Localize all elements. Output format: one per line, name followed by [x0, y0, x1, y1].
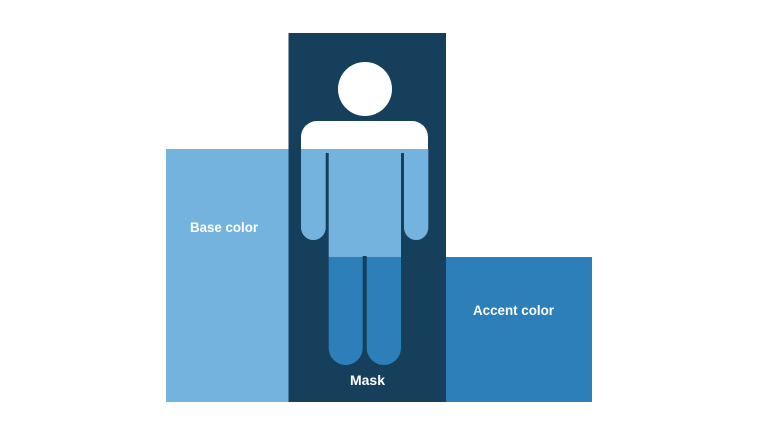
- panel: mask: [288, 33, 446, 402]
- shoulders: [301, 121, 428, 149]
- label: accent color: Accent color: [473, 302, 555, 318]
- head: [338, 62, 392, 116]
- panel: base color: [166, 149, 289, 402]
- leg divider: [363, 256, 367, 258]
- icon: person figure: [301, 62, 428, 365]
- label: mask: Mask: [350, 372, 385, 388]
- panel: accent color: [446, 257, 592, 402]
- right leg: [367, 257, 401, 365]
- label: base color: Base color: [190, 219, 259, 235]
- torso and arms: [301, 149, 428, 257]
- left leg: [329, 257, 363, 365]
